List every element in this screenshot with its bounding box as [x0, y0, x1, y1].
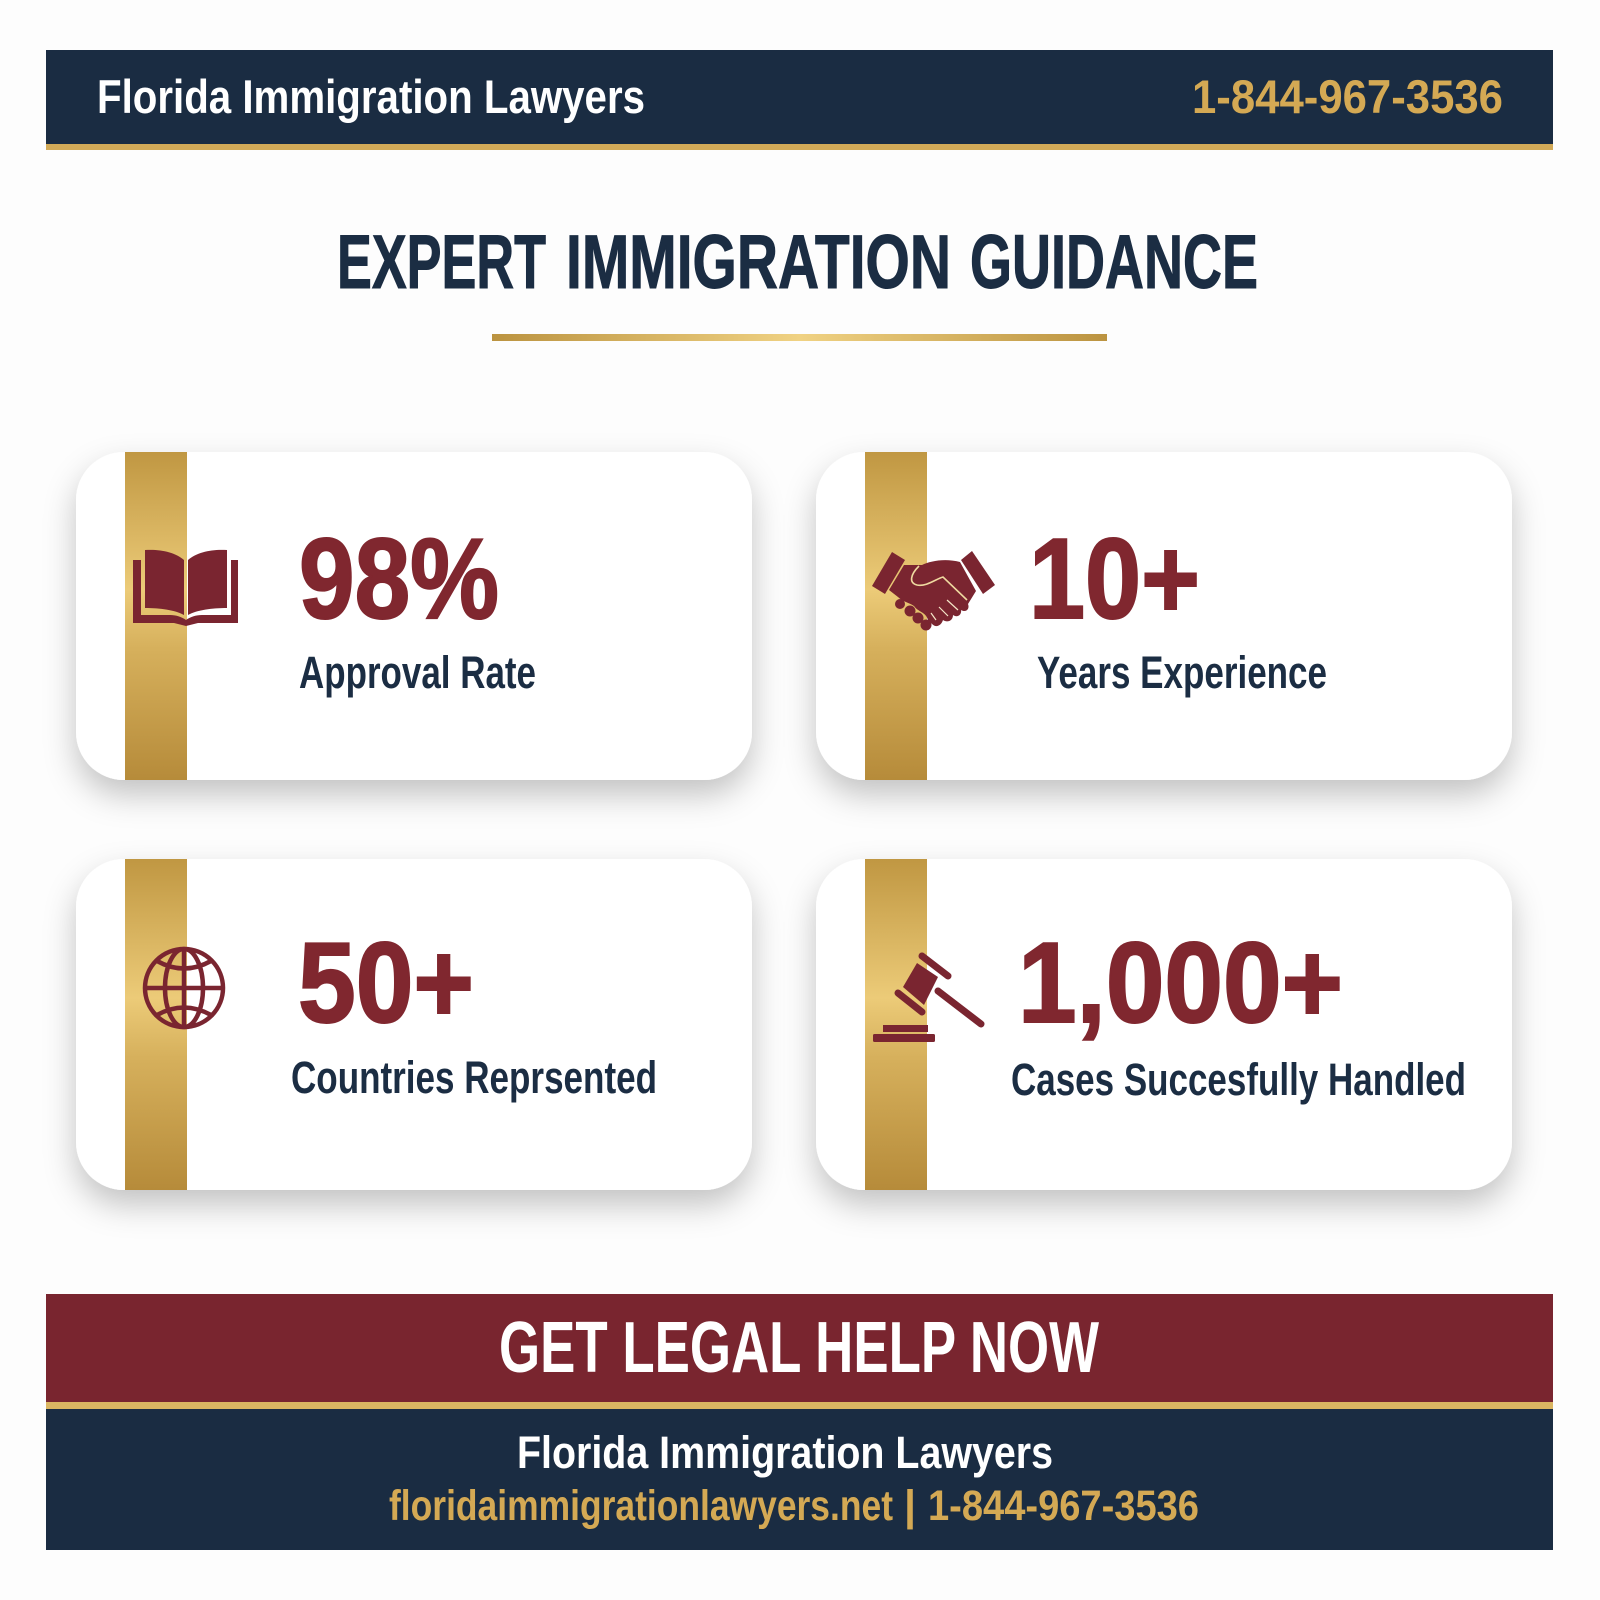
- top header bar: [46, 50, 1553, 150]
- panel: approval rate: [76, 452, 752, 780]
- firm name: Florida Immigration Lawyers: [97, 70, 645, 123]
- main title: EXPERT: [337, 220, 546, 305]
- footer website and phone: |: [904, 1482, 916, 1530]
- footer band: [46, 1409, 1553, 1550]
- footer website and phone: floridaimmigrationlawyers.net: [389, 1482, 893, 1530]
- stat: 50+: 50+: [298, 920, 474, 1047]
- main title: IMMIGRATION: [566, 220, 951, 305]
- panel: countries represented: [76, 859, 752, 1190]
- panel: years experience: [816, 452, 1512, 780]
- gold divider: [46, 1402, 1553, 1409]
- stat: 1,000+: 1,000+: [1018, 920, 1343, 1047]
- main title: GUIDANCE: [970, 220, 1258, 305]
- cta heading: GET LEGAL HELP NOW: [499, 1308, 1099, 1388]
- label: countries represented: Countries Reprsented: [291, 1052, 657, 1103]
- label: years experience: Years Experience: [1037, 647, 1327, 698]
- icon: open book: [133, 550, 238, 626]
- call-to-action band: [46, 1294, 1553, 1402]
- panel: cases handled: [816, 859, 1512, 1190]
- label: approval rate: Approval Rate: [299, 647, 536, 698]
- gold title underline: [492, 334, 1107, 341]
- icon: globe: [145, 949, 223, 1027]
- main title: [337, 220, 1258, 305]
- phone number: 1-844-967-3536: [1192, 70, 1503, 123]
- footer firm name: Florida Immigration Lawyers: [517, 1427, 1053, 1478]
- icon: handshake: [872, 551, 995, 630]
- stat: 98%: 98%: [299, 516, 499, 643]
- stat: 10+: 10+: [1029, 516, 1200, 643]
- footer website and phone: 1-844-967-3536: [928, 1482, 1199, 1530]
- icon: gavel: [873, 956, 981, 1042]
- label: cases handled: Cases Succesfully Handled: [1011, 1054, 1466, 1105]
